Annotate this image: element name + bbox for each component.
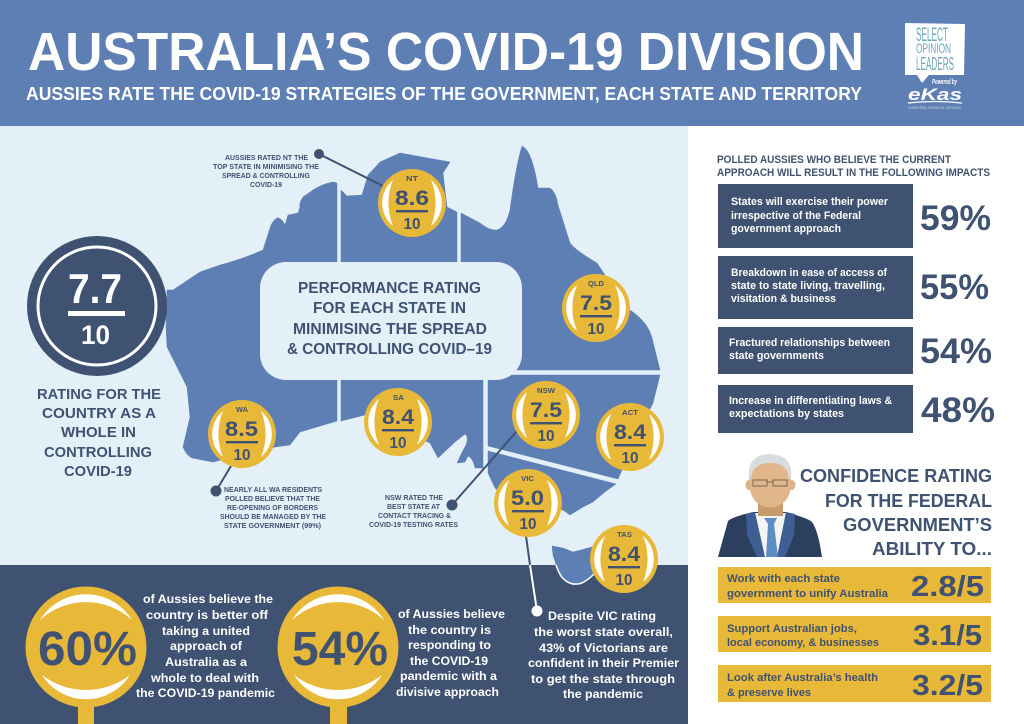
rating badge: ACT xyxy=(596,403,664,471)
map: VIC xyxy=(488,451,616,515)
map: TAS xyxy=(552,546,600,585)
rating badge: TAS: 8.4 xyxy=(608,543,640,566)
national rating caption: WHOLE IN xyxy=(61,424,136,441)
impact row: 59% xyxy=(718,184,991,248)
stat text: 60%: the COVID-19 pandemic xyxy=(136,686,275,700)
national rating caption: RATING FOR THE xyxy=(37,386,161,403)
rating badge: ACT: ACT xyxy=(622,410,639,417)
header band xyxy=(0,0,1024,126)
stat badge: 54% xyxy=(278,586,398,724)
stat badge: 54%: 54% xyxy=(292,623,388,676)
confidence row: health: Look after Australia’s health xyxy=(727,672,878,684)
callout: WA xyxy=(210,466,326,530)
logo: Select Opinion Leaders powered by eKas: LEADERS xyxy=(916,54,954,74)
logo: Select Opinion Leaders powered by eKas: OPINION xyxy=(916,40,951,56)
callout: VIC leader line xyxy=(526,536,542,616)
stat text: 60%: Australia as a xyxy=(165,655,247,669)
callout: WA: STATE GOVERNMENT (99%) xyxy=(224,523,321,530)
callout: NT: AUSSIES RATED NT THE xyxy=(225,155,308,162)
stat badge: 60%: 60% xyxy=(38,623,137,676)
VIC callout text xyxy=(528,609,679,701)
impact row: 55%: state to state living, travelling, xyxy=(731,280,885,292)
rating badge: QLD: QLD xyxy=(588,281,604,288)
impact row: 59%: government approach xyxy=(731,223,841,235)
confidence heading: GOVERNMENT’S xyxy=(843,514,992,535)
VIC callout text: confident in their Premier xyxy=(528,656,679,670)
rating badge: VIC: 10 xyxy=(520,516,537,533)
national rating badge: 7.7 xyxy=(68,265,122,312)
stat text: 60%: taking a united xyxy=(162,624,250,638)
panel: centre heading box: & CONTROLLING COVID–19 xyxy=(287,341,492,358)
impact row: 55%: 55% xyxy=(920,268,989,307)
panel: centre heading box: FOR EACH STATE IN xyxy=(313,300,466,317)
rating badge: ACT: 10 xyxy=(622,450,639,467)
VIC callout text: to get the state through xyxy=(531,672,675,686)
callout: NSW: BEST STATE AT xyxy=(387,504,441,511)
subtitle: AUSSIES RATE THE COVID-19 STRATEGIES OF THE GOVERNMENT, EACH STATE AND TERRITORY xyxy=(26,84,862,104)
confidence row: unify xyxy=(718,567,991,603)
confidence row: health: 3.2/5 xyxy=(912,670,983,702)
callout: NT: SPREAD & CONTROLLING xyxy=(222,173,311,180)
impact row: 54% xyxy=(718,327,992,374)
map: WA xyxy=(166,182,337,462)
panel: centre heading box: PERFORMANCE RATING xyxy=(298,280,481,297)
logo: Select Opinion Leaders powered by eKas: eKas xyxy=(908,85,962,104)
confidence row: jobs: Support Australian jobs, xyxy=(727,623,857,635)
national rating caption: CONTROLLING xyxy=(44,444,152,461)
callout: NT: COVID-19 xyxy=(250,182,282,189)
impact row: 48%: 48% xyxy=(921,391,995,430)
stat text: 54%: divisive approach xyxy=(396,685,499,699)
impact row: 48%: expectations by states xyxy=(729,408,844,420)
map: SA xyxy=(341,375,483,468)
rating badge: WA: WA xyxy=(236,407,248,414)
rating badge: TAS: 10 xyxy=(616,572,633,589)
impacts heading: APPROACH WILL RESULT IN THE FOLLOWING IMPACTS xyxy=(717,167,990,179)
callout: WA: RE-OPENING OF BORDERS xyxy=(227,505,318,512)
map: QLD xyxy=(461,146,660,370)
rating badge: QLD: 10 xyxy=(588,321,605,338)
VIC callout text: the worst state overall, xyxy=(534,625,673,639)
impact row: 54%: Fractured relationships between xyxy=(729,337,890,349)
icon: politician in suit xyxy=(718,454,822,557)
impact row: 54%: 54% xyxy=(920,332,992,371)
rating badge: NSW: NSW xyxy=(537,388,555,395)
logo: Select Opinion Leaders powered by eKas xyxy=(905,23,965,110)
VIC callout text: Despite VIC rating xyxy=(548,609,656,623)
impact row: 48%: Increase in differentiating laws & xyxy=(729,395,892,407)
callout: NSW: CONTACT TRACING & xyxy=(378,513,451,520)
national rating caption: COVID-19 xyxy=(64,463,132,480)
rating badge: NSW xyxy=(512,381,580,449)
panel: map background xyxy=(0,126,688,565)
rating badge: VIC: 5.0 xyxy=(511,487,544,510)
rating badge: NT: NT xyxy=(406,176,419,183)
national rating caption xyxy=(37,386,161,480)
impact row: 54%: state governments xyxy=(729,350,824,362)
impact row: 59%: 59% xyxy=(920,199,991,238)
rating badge: WA: 8.5 xyxy=(225,418,258,441)
stat badge: 60% xyxy=(26,586,146,724)
callout: NSW xyxy=(369,431,517,529)
stat text: 54% xyxy=(396,607,505,699)
TAS outline on dark band xyxy=(556,565,594,584)
rating badge: QLD xyxy=(562,274,630,342)
rating badge: ACT: 8.4 xyxy=(614,421,646,444)
rating badge: SA: 10 xyxy=(390,435,407,452)
impact row: 48% xyxy=(718,385,995,433)
national rating badge: 10 xyxy=(81,320,110,350)
confidence row: jobs: 3.1/5 xyxy=(913,620,982,652)
rating badge: NT: 10 xyxy=(404,216,421,233)
callout: NSW: NSW RATED THE xyxy=(385,495,443,502)
callout: WA: POLLED BELIEVE THAT THE xyxy=(225,496,320,503)
stat text: 54%: the country is xyxy=(408,623,491,637)
confidence row: health: & preserve lives xyxy=(727,687,811,699)
rating badge: NT xyxy=(378,169,446,237)
confidence row: health xyxy=(718,665,991,702)
callout: NT: TOP STATE IN MINIMISING THE xyxy=(213,164,319,171)
rating badge: WA xyxy=(208,400,276,468)
impact row: 55%: Breakdown in ease of access of xyxy=(731,267,887,279)
callout: NSW: COVID-19 TESTING RATES xyxy=(369,522,458,529)
VIC callout text: the pandemic xyxy=(563,687,643,701)
rating badge: TAS xyxy=(590,525,658,593)
stat text: 60%: of Aussies believe the xyxy=(143,592,273,606)
rating badge: NT: 8.6 xyxy=(395,187,429,210)
map: NT xyxy=(341,153,457,272)
rating badge: SA xyxy=(364,388,432,456)
rating badge: NSW: 7.5 xyxy=(530,399,562,422)
callout: WA: SHOULD BE MANAGED BY THE xyxy=(220,514,326,521)
confidence row: jobs: local economy, & businesses xyxy=(727,637,879,649)
confidence row: unify: Work with each state xyxy=(727,573,840,585)
national rating badge xyxy=(27,236,167,376)
panel: bottom dark band xyxy=(0,565,688,724)
logo: Select Opinion Leaders powered by eKas: SELECT xyxy=(916,25,948,46)
logo: Select Opinion Leaders powered by eKas: marketing research services xyxy=(908,105,962,110)
impact row: 55%: visitation & business xyxy=(731,293,836,305)
stat text: 60%: country is better off xyxy=(146,608,269,622)
stat text: 60%: whole to deal with xyxy=(150,671,259,685)
confidence heading: CONFIDENCE RATING xyxy=(800,465,992,486)
rating badge: WA: 10 xyxy=(234,447,251,464)
rating badge: VIC xyxy=(494,469,562,537)
confidence heading xyxy=(800,465,992,559)
rating badge: VIC: VIC xyxy=(521,476,534,483)
map of Australia xyxy=(166,146,660,585)
confidence heading: FOR THE FEDERAL xyxy=(825,490,992,511)
rating badge: SA: SA xyxy=(393,395,404,402)
national rating caption: COUNTRY AS A xyxy=(42,405,156,422)
rating badge: TAS: TAS xyxy=(617,532,632,539)
stat text: 54%: the COVID-19 xyxy=(410,654,488,668)
stat text: 54%: of Aussies believe xyxy=(398,607,505,621)
callout: WA: NEARLY ALL WA RESIDENTS xyxy=(224,487,322,494)
stat text: 60% xyxy=(136,592,275,700)
stat text: 60%: approach of xyxy=(170,639,243,653)
stat text: 54%: pandemic with a xyxy=(400,669,497,683)
confidence row: jobs xyxy=(718,616,991,652)
callout: NT xyxy=(213,149,385,189)
impacts heading: POLLED AUSSIES WHO BELIEVE THE CURRENT xyxy=(717,154,951,166)
stat text: 54%: responding to xyxy=(408,638,491,652)
logo: Select Opinion Leaders powered by eKas: Powered by xyxy=(932,79,958,86)
panel: centre heading box xyxy=(260,262,522,380)
VIC callout text: 43% of Victorians are xyxy=(539,641,668,655)
map: NSW xyxy=(488,375,660,479)
confidence row: unify: government to unify Australia xyxy=(727,588,889,600)
impacts heading xyxy=(717,154,990,179)
rating badge: QLD: 7.5 xyxy=(580,292,612,315)
impact row: 59%: States will exercise their power xyxy=(731,196,889,208)
rating badge: NSW: 10 xyxy=(538,428,555,445)
panel: centre heading box: MINIMISING THE SPREAD xyxy=(293,321,487,338)
confidence row: unify: 2.8/5 xyxy=(911,571,984,603)
rating badge: SA: 8.4 xyxy=(382,406,414,429)
title: AUSTRALIA’S COVID-19 DIVISION xyxy=(28,22,864,82)
impact row: 59%: irrespective of the Federal xyxy=(731,210,861,222)
impact row: 55% xyxy=(718,256,989,319)
confidence heading: ABILITY TO... xyxy=(872,538,992,559)
